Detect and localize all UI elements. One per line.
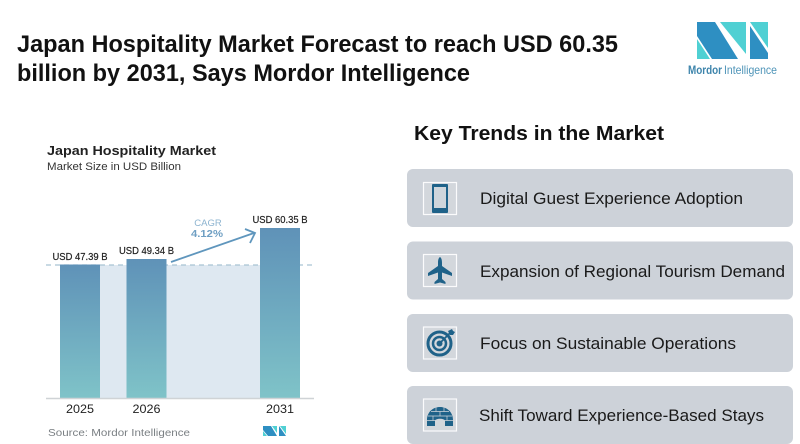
small logo <box>263 426 286 436</box>
bar: 2026: 2026 <box>132 404 160 416</box>
bar: 2025: USD 47.39 B <box>52 251 108 263</box>
card: regional tourism <box>407 242 793 300</box>
card: digital guest experience: Digital Guest Experience Adoption <box>480 189 743 208</box>
bar: 2031 <box>252 214 308 416</box>
icon: igloo <box>424 399 456 431</box>
title: billion by 2031, Says Mordor Intelligence <box>17 60 470 87</box>
card: digital guest experience <box>407 169 793 227</box>
chart heading: Japan Hospitality Market <box>47 143 217 158</box>
logo: Mordor Intelligence <box>688 22 777 77</box>
card: sustainable operations <box>407 314 793 372</box>
bar: 2026: USD 49.34 B <box>119 245 174 257</box>
bar: 2025 <box>52 251 108 416</box>
card: experience-based stays <box>407 386 793 444</box>
bar: 2031: USD 60.35 B <box>252 214 308 226</box>
title <box>17 31 618 87</box>
icon: smartphone <box>424 182 456 214</box>
bar: 2026 <box>119 245 174 416</box>
chart heading: Market Size in USD Billion <box>47 161 181 173</box>
title: Japan Hospitality Market Forecast to reach USD 60.35 <box>17 31 618 58</box>
bar chart <box>46 214 315 416</box>
card: sustainable operations: Focus on Sustainable Operations <box>480 334 736 353</box>
bar: 2025: 2025 <box>66 404 94 416</box>
icon: target <box>424 327 456 359</box>
CAGR label: 4.12% <box>191 228 224 240</box>
CAGR label <box>191 218 224 240</box>
card: regional tourism: Expansion of Regional Tourism Demand <box>480 262 785 281</box>
logo: Mordor Intelligence: Mordor <box>688 63 722 77</box>
source: Source: Mordor Intelligence <box>48 427 190 439</box>
arrow: CAGR growth <box>171 229 255 262</box>
CAGR label: CAGR <box>194 218 222 229</box>
bar: 2031: 2031 <box>266 404 294 416</box>
icon: airplane <box>424 254 456 286</box>
chart heading <box>47 143 217 173</box>
logo: Mordor Intelligence: Intelligence <box>724 63 777 77</box>
card: experience-based stays: Shift Toward Experience-Based Stays <box>479 406 764 425</box>
trends heading: Key Trends in the Market <box>414 122 664 145</box>
